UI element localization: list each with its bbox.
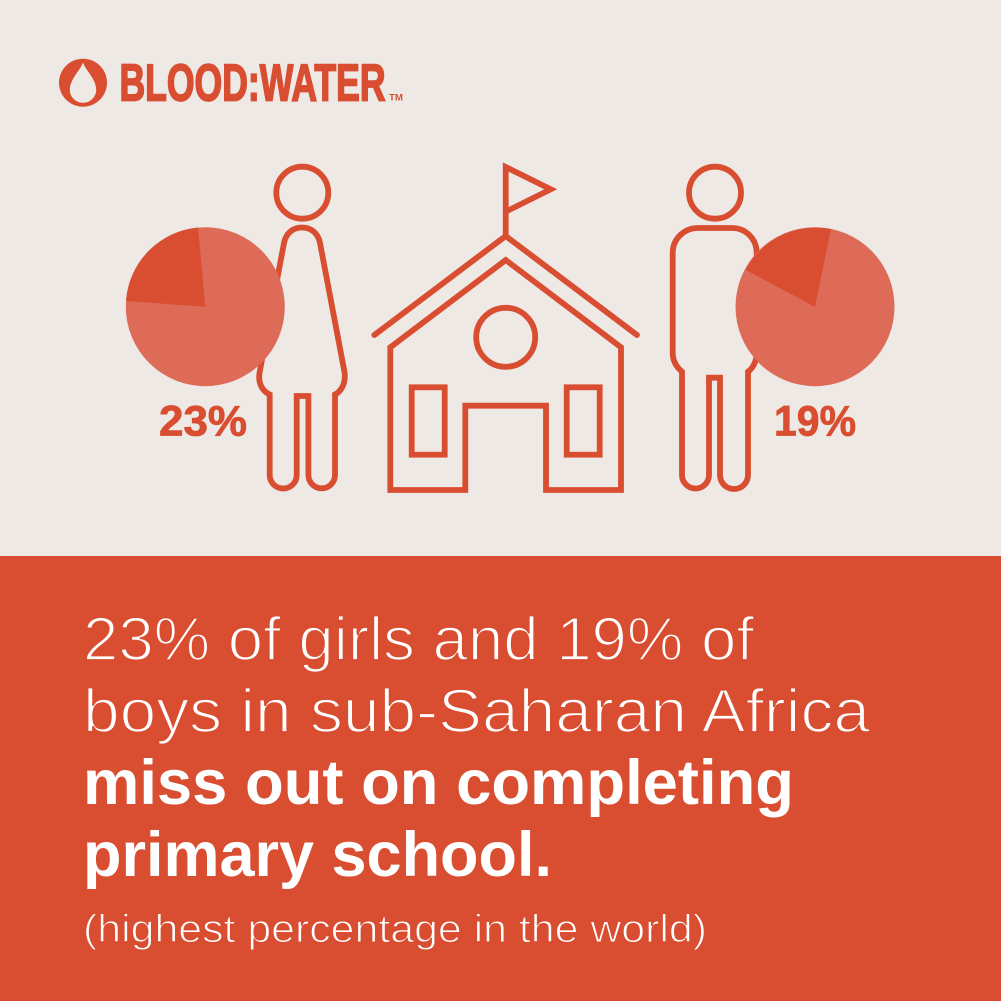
trademark: TM	[389, 92, 403, 102]
label: 23%: 23%	[159, 398, 247, 446]
icon: boy outline	[673, 167, 757, 489]
boy figure with pie chart	[673, 167, 894, 489]
panel: statement	[0, 556, 1001, 1001]
logo wordmark: BLOOD:WATER	[120, 54, 386, 112]
flag	[506, 167, 551, 236]
icon: drop in circle	[59, 59, 107, 107]
building outline with door	[390, 260, 621, 490]
logo: Blood:Water	[59, 54, 403, 112]
bold text line 1: miss out on completing	[83, 748, 794, 818]
school building icon	[374, 167, 637, 490]
light text line 2: boys in sub-Saharan Africa	[83, 677, 870, 745]
round window	[476, 308, 535, 367]
girl figure with pie chart	[126, 167, 345, 488]
footnote: (highest percentage in the world)	[83, 908, 707, 951]
roof	[374, 236, 637, 335]
left window	[412, 387, 445, 455]
icon: girl outline	[259, 167, 345, 488]
light text line 1: 23% of girls and 19% of	[83, 605, 755, 673]
pie chart: 23%	[126, 227, 285, 386]
pie chart: 19%	[736, 227, 894, 386]
label: 19%: 19%	[774, 397, 856, 445]
bold text line 2: primary school.	[83, 820, 552, 890]
right window	[567, 387, 600, 455]
